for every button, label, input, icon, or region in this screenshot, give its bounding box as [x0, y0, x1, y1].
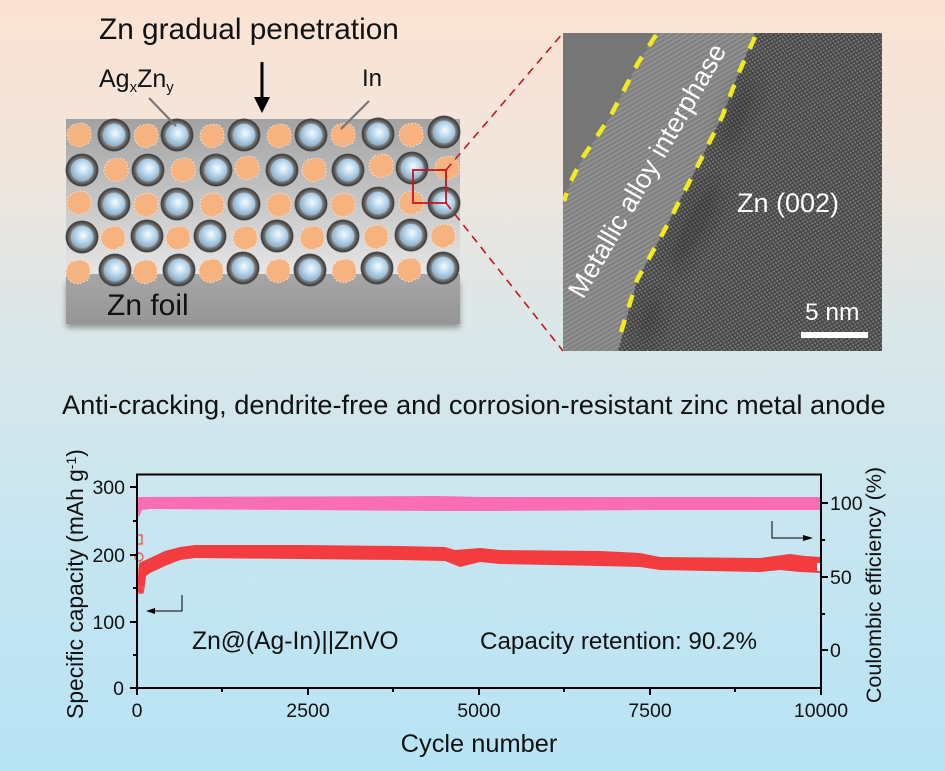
x axis title: Cycle number [401, 730, 558, 758]
label: AgxZny: Ag [99, 65, 130, 93]
label: Metallic alloy interphase: Metallic alloy interphase [562, 38, 732, 303]
left axis title: Specific capacity (mAh g [62, 469, 88, 719]
dashed boundary lines [564, 35, 755, 342]
x axis tick labels: 2500 [286, 700, 330, 722]
left axis title: -1 [63, 457, 79, 469]
interphase region [563, 33, 755, 351]
alloy layer [66, 119, 460, 274]
right axis tick labels: 0 [830, 640, 841, 662]
x axis tick labels: 7500 [628, 700, 672, 722]
left axis tick labels: 100 [92, 612, 125, 634]
label: In: In [362, 65, 382, 92]
x axis tick labels: 5000 [457, 700, 501, 722]
zoom indicator box and dashed lines [413, 33, 563, 351]
label: Zn (002): Zn (002) [737, 188, 839, 218]
zn foil [66, 274, 460, 324]
right axis tick labels [830, 493, 863, 662]
right axis tick labels: 100 [830, 493, 863, 515]
series: specific capacity [137, 545, 821, 594]
label: Zn foil: Zn foil [107, 289, 189, 322]
AgxZny particles [66, 116, 460, 286]
x axis tick labels [132, 700, 848, 722]
panel: layered electrode schematic [66, 98, 460, 328]
scale bar: 5 nm [805, 299, 859, 326]
right axis tick labels: 50 [830, 567, 852, 589]
label: capacity retention: Capacity retention: 90.2% [480, 628, 757, 655]
right axis title: Coulombic efficiency (%) [862, 467, 886, 703]
label: AgxZny: y [166, 79, 174, 96]
series: coulombic efficiency [137, 496, 821, 517]
label: cell name: Zn@(Ag-In)||ZnVO [192, 628, 399, 655]
vacuum region [563, 33, 656, 201]
x axis tick labels: 0 [132, 700, 143, 722]
scale bar [801, 304, 868, 338]
left arrow indicator [146, 595, 182, 614]
axes frame [130, 474, 828, 695]
subtitle: Anti-cracking, dendrite-free and corrosion-resistant zinc metal anode [62, 389, 886, 420]
left axis tick labels [92, 477, 125, 700]
chart: capacity and coulombic efficiency [62, 449, 886, 758]
arrow: penetration direction [254, 62, 270, 113]
dark contrast bands [635, 71, 760, 350]
leader lines [149, 98, 369, 129]
title: Zn gradual penetration: Zn gradual penetration [99, 13, 399, 46]
label: AgxZny: x [130, 79, 138, 96]
label: AgxZny: Zn [137, 65, 166, 93]
left axis tick labels: 300 [92, 477, 125, 499]
left axis tick labels: 200 [92, 545, 125, 567]
early data markers [135, 535, 143, 593]
left axis tick labels: 0 [113, 678, 124, 700]
left axis title: ) [62, 449, 88, 457]
indium particles [66, 123, 459, 284]
right arrow indicator [772, 521, 813, 541]
panel: TEM micrograph [562, 33, 882, 351]
x axis tick labels: 10000 [794, 700, 848, 722]
